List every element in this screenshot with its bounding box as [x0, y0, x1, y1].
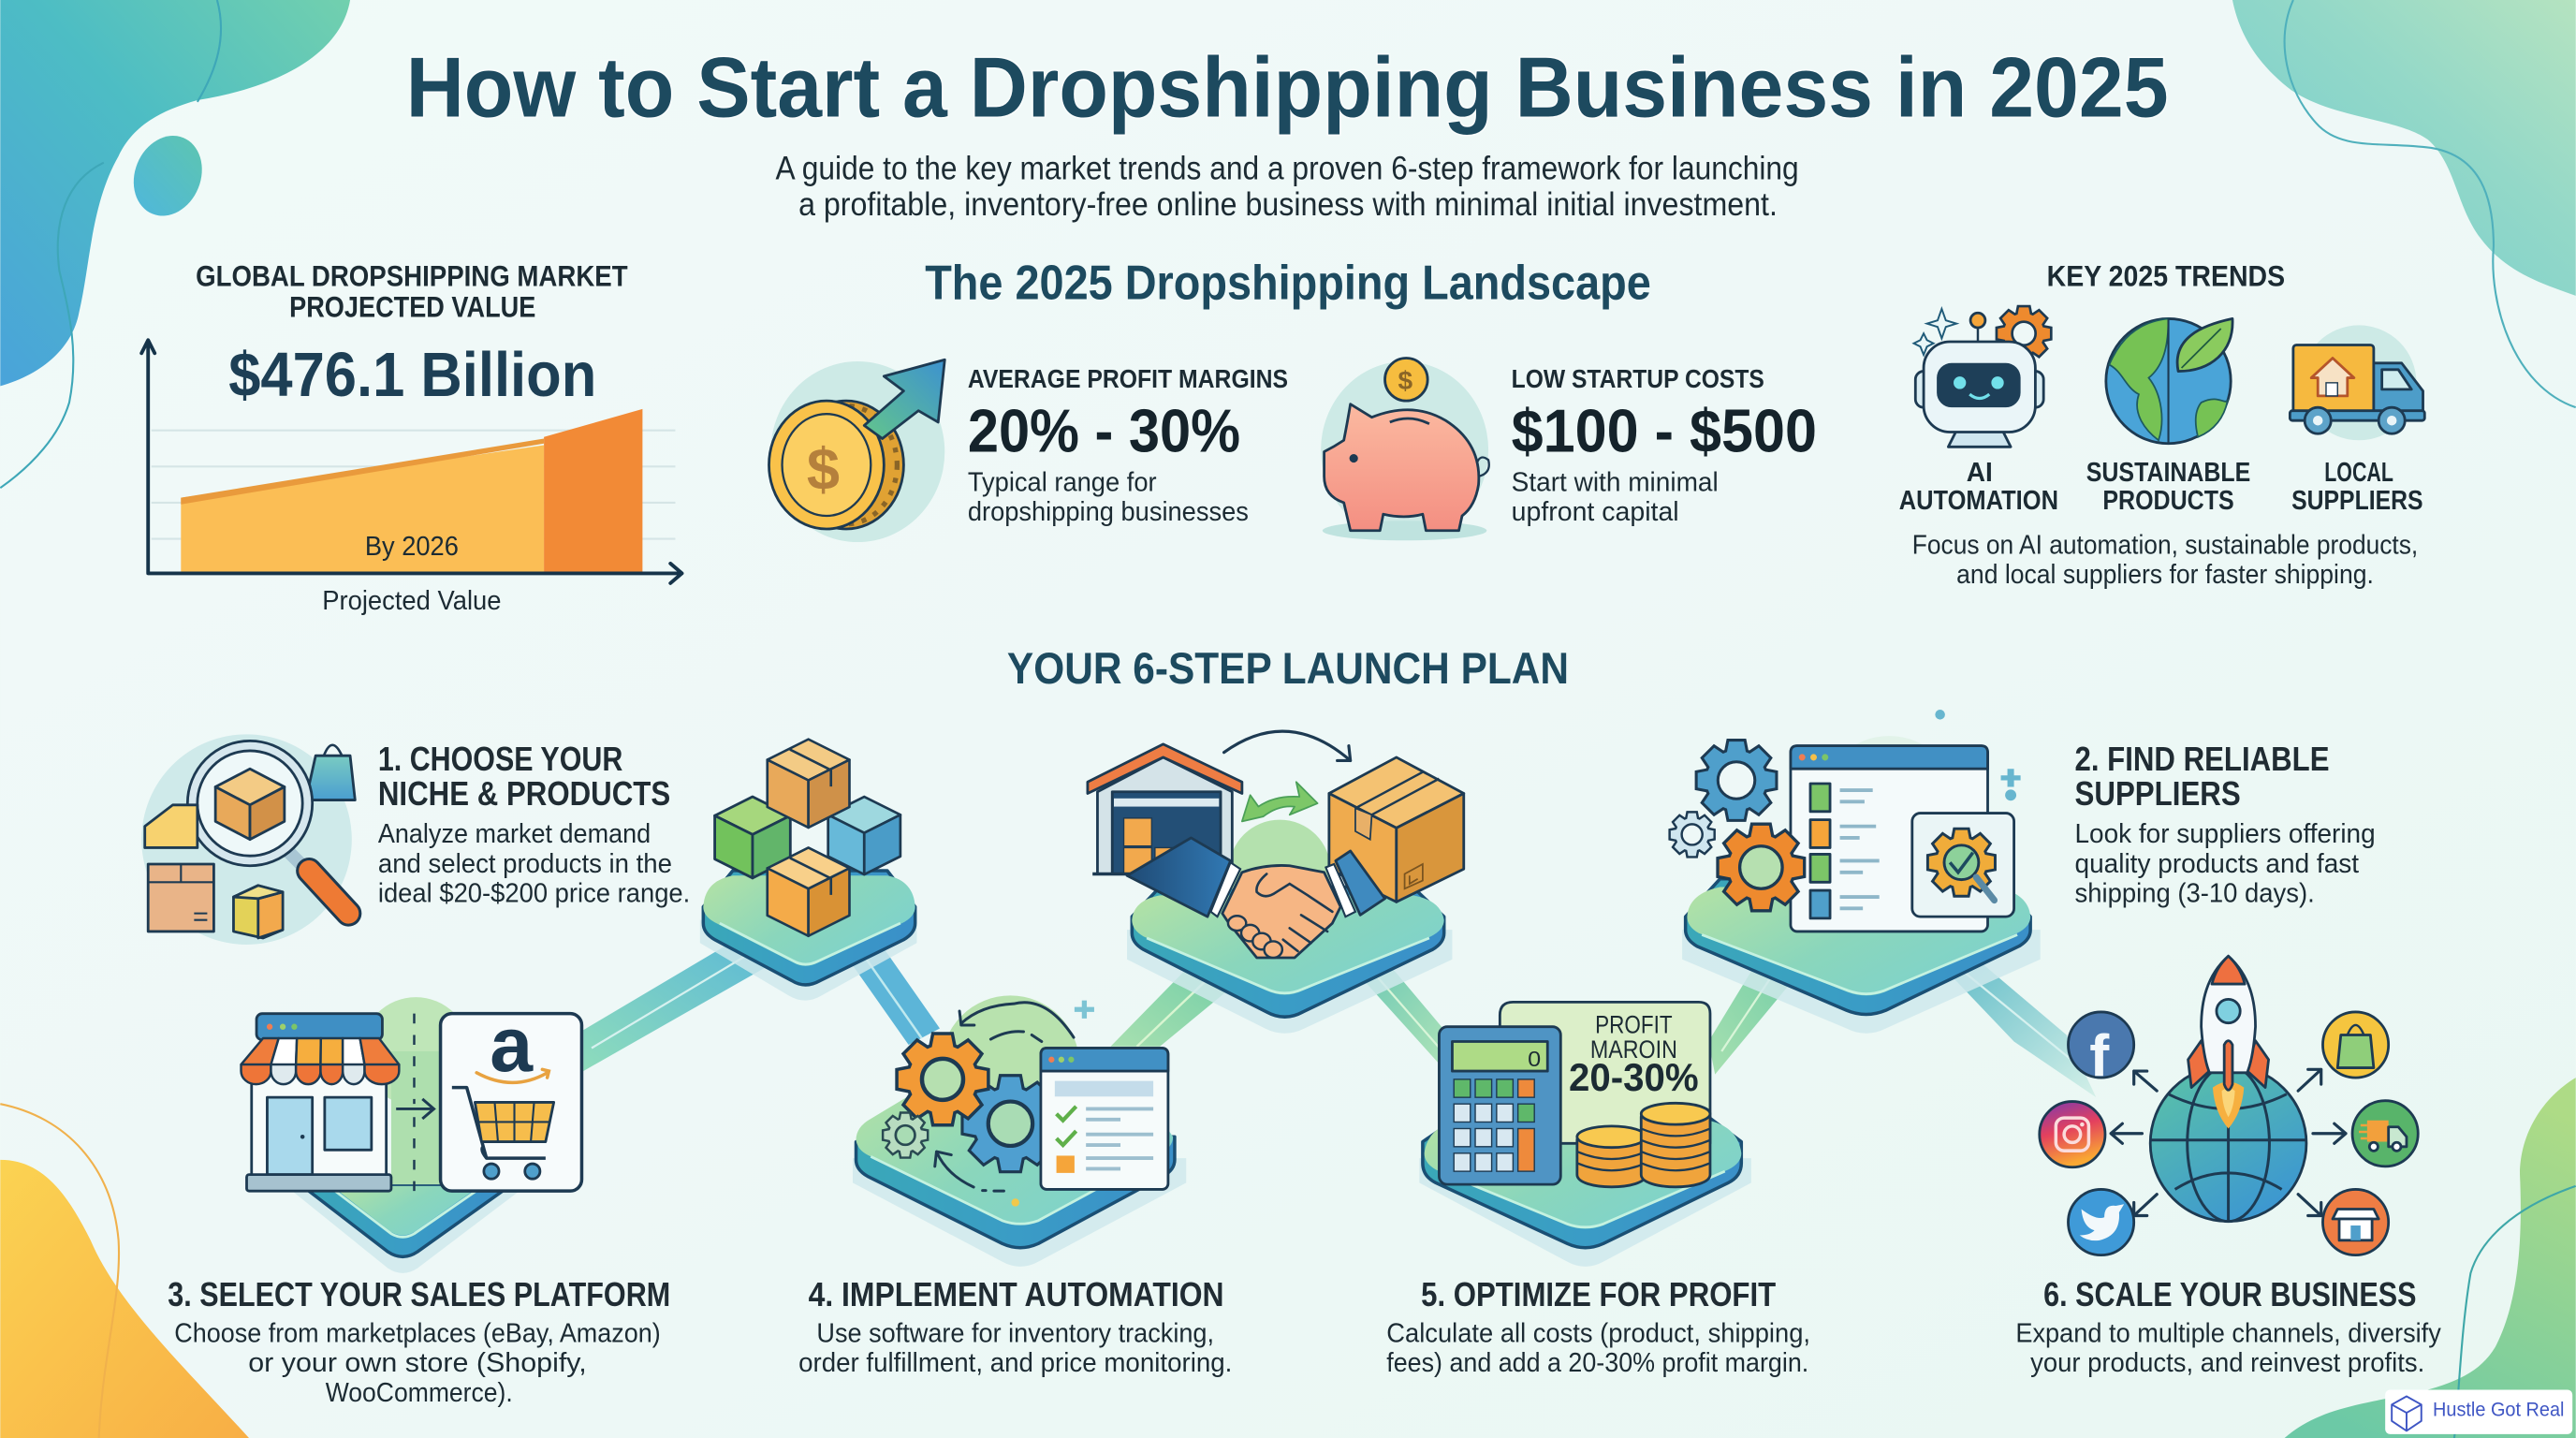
icon: AI robot: [1914, 306, 2051, 447]
step 2 text: Look for suppliers offering: [2075, 819, 2376, 849]
icon: magnifier with boxes: [141, 734, 355, 945]
icon: handshake: [1127, 838, 1385, 958]
icon: coin stacks: [1577, 1103, 1710, 1187]
arrow: curved exchange: [1224, 731, 1351, 760]
step 3 text: or your own store (Shopify,: [248, 1348, 587, 1378]
stat: profit margins: Typical range for: [968, 468, 1157, 498]
background oval: top-left: [122, 125, 213, 227]
icon: facebook: [2068, 1012, 2134, 1089]
arrows: radiating channels: [2111, 1069, 2346, 1215]
bar label: By 2026: [365, 532, 459, 562]
background curve: bottom-right: [2454, 1186, 2576, 1438]
step 3 text: WooCommerce).: [326, 1378, 513, 1408]
platform: step 5: [1419, 1117, 1751, 1267]
step 6 text: Expand to multiple channels, diversify: [2015, 1319, 2441, 1349]
step 1 text: 1. CHOOSE YOUR: [378, 740, 622, 778]
platform: step 1: [700, 871, 916, 1001]
icon: piggy bank: $: [1398, 366, 1413, 395]
path connectors: [583, 930, 2096, 1097]
platform: step 2 handshake: [1127, 888, 1452, 1034]
step 6 text: [2015, 1275, 2441, 1378]
step 5 text: [1386, 1275, 1810, 1378]
icon: supplier dashboard with gears: [1670, 736, 2014, 932]
market value: $476.1 Billion: [228, 341, 596, 410]
trends description: [1912, 530, 2418, 590]
icon: coin with arrow: [769, 360, 944, 542]
step 1 text: and select products in the: [378, 849, 672, 879]
icon: instagram: [2040, 1102, 2105, 1167]
icon: facebook: f: [2089, 1023, 2110, 1089]
trend labels: PRODUCTS: [2102, 486, 2234, 516]
stat: profit margins: [968, 364, 1288, 527]
step 2 text: 2. FIND RELIABLE: [2075, 740, 2329, 778]
icon: twitter: [2068, 1189, 2134, 1255]
background curve: bottom-left: [0, 1104, 119, 1438]
area chart: [141, 340, 682, 583]
icon: globe with rocket: [2150, 956, 2306, 1222]
subtitle: [776, 150, 1799, 223]
background blob: top-right: [2232, 0, 2576, 296]
stat: profit margins: AVERAGE PROFIT MARGINS: [968, 364, 1288, 393]
step 4 text: [798, 1275, 1232, 1378]
trend labels: AI: [1967, 458, 1993, 488]
icon: store badge: [2322, 1189, 2389, 1255]
icon: coin with arrow: $: [807, 437, 840, 503]
decorative dot: [1012, 1198, 1019, 1207]
trend labels: [1899, 458, 2423, 516]
stat: startup costs: [1512, 364, 1817, 527]
background curve: top-right: [2285, 0, 2576, 407]
background blob: bottom-right: [2283, 1078, 2576, 1438]
step 4 text: 4. IMPLEMENT AUTOMATION: [809, 1275, 1224, 1313]
stat: startup costs: upfront capital: [1512, 497, 1679, 527]
stat: profit margins: dropshipping businesses: [968, 497, 1249, 527]
icon: amazon card with cart: a: [490, 1002, 534, 1088]
subtitle: A guide to the key market trends and a proven 6-step framework for launching: [776, 150, 1799, 186]
heading: key trends: KEY 2025 TRENDS: [2047, 258, 2285, 292]
platform: step 3: [286, 997, 526, 1273]
step 1 text: ideal $20-$200 price range.: [378, 878, 690, 908]
step 4 text: Use software for inventory tracking,: [816, 1319, 1214, 1349]
axis label: Projected Value: [322, 586, 501, 616]
decorative plus: [1075, 1001, 1094, 1019]
title: How to Start a Dropshipping Business in 2025: [406, 40, 2169, 136]
icon: calculator: [1439, 1027, 1560, 1184]
card: profit margin: PROFIT: [1595, 1010, 1673, 1039]
stat: startup costs: $100 - $500: [1512, 397, 1817, 465]
step 2 text: SUPPLIERS: [2075, 774, 2241, 813]
platform: step 2 suppliers: [1682, 879, 2041, 1034]
step 1 text: NICHE & PRODUCTS: [378, 774, 670, 813]
step 6 text: your products, and reinvest profits.: [2030, 1348, 2424, 1378]
stat: startup costs: LOW STARTUP COSTS: [1512, 364, 1764, 393]
trend labels: SUSTAINABLE: [2086, 458, 2250, 488]
step 6 text: 6. SCALE YOUR BUSINESS: [2043, 1275, 2416, 1313]
step 5 text: 5. OPTIMIZE FOR PROFIT: [1421, 1275, 1776, 1313]
subtitle: a profitable, inventory-free online business with minimal initial investment.: [798, 186, 1778, 223]
trend labels: AUTOMATION: [1899, 486, 2058, 516]
step 3 text: Choose from marketplaces (eBay, Amazon): [174, 1319, 661, 1349]
section heading: landscape: The 2025 Dropshipping Landscape: [925, 255, 1651, 309]
chart heading: PROJECTED VALUE: [289, 290, 535, 324]
icon: storefront: [242, 1014, 399, 1191]
trends description: and local suppliers for faster shipping.: [1956, 560, 2374, 590]
step 5 text: Calculate all costs (product, shipping,: [1386, 1319, 1810, 1349]
trend labels: LOCAL: [2324, 458, 2393, 488]
card: profit margin: 20-30%: [1569, 1055, 1699, 1099]
step 4 text: order fulfillment, and price monitoring.: [798, 1348, 1232, 1378]
step 1 text: Analyze market demand: [378, 819, 651, 849]
step 2 text: shipping (3-10 days).: [2075, 878, 2315, 908]
panel: global market chart: [141, 258, 682, 616]
trends description: Focus on AI automation, sustainable products,: [1912, 530, 2418, 560]
icon: earth with leaf: [2106, 318, 2232, 444]
section heading: launch plan: YOUR 6-STEP LAUNCH PLAN: [1007, 644, 1569, 694]
card: profit margin: [1500, 1002, 1710, 1143]
icon: delivery truck: [2290, 325, 2424, 440]
stat: startup costs: Start with minimal: [1512, 468, 1719, 498]
watermark badge: [2385, 1389, 2572, 1434]
platform: step 4: [853, 995, 1186, 1267]
stat: profit margins: 20% - 30%: [968, 397, 1240, 465]
step 5 text: fees) and add a 20-30% profit margin.: [1386, 1348, 1808, 1378]
chart heading: GLOBAL DROPSHIPPING MARKET: [196, 258, 628, 292]
background curve: top-left: [0, 0, 221, 488]
step 2 text: quality products and fast: [2075, 849, 2359, 879]
background blob: top-left: [0, 0, 350, 386]
step 2 text: [2075, 740, 2376, 908]
step 3 text: 3. SELECT YOUR SALES PLATFORM: [168, 1275, 670, 1313]
arrows: automation cycle: [935, 1003, 1074, 1191]
icon: shopping bag: [2322, 1012, 2389, 1078]
decorative sparkle dots: [1935, 710, 2021, 800]
icon: warehouse: [1088, 744, 1242, 875]
watermark badge: Hustle Got Real: [2433, 1400, 2564, 1421]
chart heading: [196, 258, 628, 324]
card: profit margin: MAROIN: [1590, 1034, 1677, 1064]
icon: delivery badge: [2352, 1101, 2418, 1167]
icon: green dome: [1229, 820, 1331, 921]
step 1 text: [378, 740, 690, 908]
icon: green exchange arrows: [1242, 782, 1318, 821]
icon: automation gears and checklist: [883, 1034, 1168, 1189]
step 3 text: [168, 1275, 670, 1408]
icon: calculator: 0: [1528, 1047, 1541, 1071]
icon: four product boxes: [715, 740, 900, 936]
background blob: bottom-left: [0, 1160, 250, 1438]
icon: piggy bank: [1321, 359, 1489, 540]
arrow: store to marketplace: [396, 1014, 434, 1196]
icon: amazon card with cart: [441, 1002, 581, 1191]
trend labels: SUPPLIERS: [2291, 486, 2423, 516]
icon: shipping box: [1329, 757, 1464, 902]
